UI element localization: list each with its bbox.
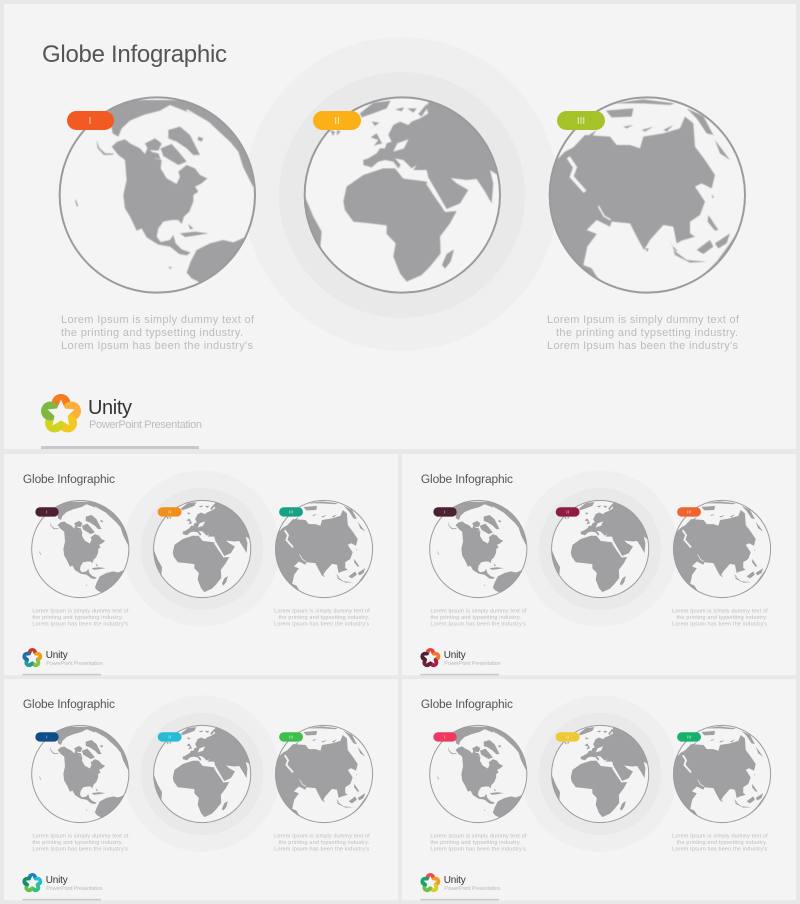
left text block: Lorem Ipsum has been the industry's xyxy=(61,340,254,352)
logo icon xyxy=(22,873,42,892)
left text: Lorem Ipsum has been the industry's xyxy=(430,847,526,853)
left text: the printing and typsetting industry. xyxy=(32,615,123,621)
rings xyxy=(521,695,678,852)
rings xyxy=(123,695,280,852)
globe: Americas xyxy=(32,725,133,823)
globe: Asia xyxy=(272,500,378,598)
panel: thumbnail variant D xyxy=(402,679,796,900)
logo wordmark xyxy=(46,650,102,667)
logo wordmark xyxy=(46,875,102,892)
logo icon xyxy=(41,394,81,432)
badge I: I xyxy=(444,735,445,741)
badge I: I xyxy=(444,510,445,516)
left text: the printing and typsetting industry. xyxy=(430,615,521,621)
left text: the printing and typsetting industry. xyxy=(430,840,521,846)
globe: Americas xyxy=(430,500,531,598)
left text: Lorem Ipsum is simply dummy text of xyxy=(32,609,129,615)
badge III xyxy=(557,111,605,130)
right text: Lorem Ipsum has been the industry's xyxy=(672,847,767,853)
left text xyxy=(32,834,129,853)
right text xyxy=(672,834,768,853)
right text: Lorem Ipsum has been the industry's xyxy=(274,847,369,853)
logo wordmark: Unity xyxy=(444,875,466,886)
left text block: the printing and typsetting industry. xyxy=(61,327,243,339)
badge III xyxy=(279,507,303,517)
right text: the printing and typsetting industry. xyxy=(677,615,768,621)
globe: Americas xyxy=(60,97,263,293)
title: Globe Infographic xyxy=(23,472,115,486)
badge III: III xyxy=(289,510,293,516)
badge II xyxy=(158,732,182,742)
logo icon xyxy=(420,873,440,892)
globe: Africa and Europe xyxy=(148,500,257,598)
logo wordmark: PowerPoint Presentation xyxy=(46,661,102,667)
right text: Lorem Ipsum has been the industry's xyxy=(274,622,369,628)
footer bar xyxy=(22,674,101,675)
logo wordmark xyxy=(444,875,500,892)
badge III: III xyxy=(687,735,691,741)
logo wordmark: PowerPoint Presentation xyxy=(46,886,102,892)
logo wordmark: Unity xyxy=(46,875,68,886)
logo wordmark: Unity xyxy=(88,397,132,419)
panel: thumbnail variant C xyxy=(4,679,398,900)
right text block xyxy=(547,314,740,352)
badge II: II xyxy=(566,510,569,516)
badge II: II xyxy=(168,735,171,741)
globe: Asia xyxy=(543,97,757,293)
badge I: I xyxy=(89,116,91,127)
badge II xyxy=(556,507,580,517)
left text block xyxy=(61,314,255,352)
right text: the printing and typsetting industry. xyxy=(677,840,768,846)
left text: Lorem Ipsum is simply dummy text of xyxy=(430,834,527,840)
footer bar xyxy=(22,899,101,900)
right text: Lorem Ipsum is simply dummy text of xyxy=(274,609,370,615)
logo wordmark xyxy=(88,397,202,431)
title: Globe Infographic xyxy=(23,697,115,711)
globe: Africa and Europe xyxy=(148,725,257,823)
logo wordmark: PowerPoint Presentation xyxy=(444,661,500,667)
right text: Lorem Ipsum is simply dummy text of xyxy=(672,609,768,615)
logo icon xyxy=(420,648,440,667)
badge I: I xyxy=(46,510,47,516)
left text xyxy=(430,609,527,628)
globe: Africa and Europe xyxy=(546,500,655,598)
globe: Africa and Europe xyxy=(546,725,655,823)
left text: Lorem Ipsum has been the industry's xyxy=(32,847,128,853)
title: Globe Infographic xyxy=(421,697,513,711)
right text xyxy=(274,609,370,628)
footer bar xyxy=(420,899,499,900)
globe: Asia xyxy=(272,725,378,823)
right text: Lorem Ipsum has been the industry's xyxy=(672,622,767,628)
left text xyxy=(430,834,527,853)
logo wordmark: PowerPoint Presentation xyxy=(444,886,500,892)
globe: Asia xyxy=(670,500,776,598)
logo wordmark: Unity xyxy=(444,650,466,661)
left text: Lorem Ipsum is simply dummy text of xyxy=(430,609,527,615)
globe: Africa and Europe xyxy=(293,97,513,293)
badge III xyxy=(677,732,701,742)
badge I xyxy=(433,732,457,742)
right text xyxy=(672,609,768,628)
panel: thumbnail variant A xyxy=(4,454,398,675)
right text: Lorem Ipsum is simply dummy text of xyxy=(274,834,370,840)
left text block: Lorem Ipsum is simply dummy text of xyxy=(61,314,255,326)
right text: Lorem Ipsum is simply dummy text of xyxy=(672,834,768,840)
title: Globe Infographic xyxy=(421,472,513,486)
logo wordmark: Unity xyxy=(46,650,68,661)
badge II: II xyxy=(566,735,569,741)
rings xyxy=(521,470,678,627)
badge II: II xyxy=(168,510,171,516)
badge III xyxy=(279,732,303,742)
left text: the printing and typsetting industry. xyxy=(32,840,123,846)
left text: Lorem Ipsum has been the industry's xyxy=(430,622,526,628)
badge III xyxy=(677,507,701,517)
panel: main slide xyxy=(4,4,796,449)
title: Globe Infographic xyxy=(42,41,227,68)
badge II xyxy=(556,732,580,742)
rings xyxy=(123,470,280,627)
right text block: Lorem Ipsum is simply dummy text of xyxy=(547,314,740,326)
concentric ring backdrop xyxy=(244,37,558,351)
left text: Lorem Ipsum is simply dummy text of xyxy=(32,834,129,840)
badge II xyxy=(313,111,361,130)
globe: Americas xyxy=(32,500,133,598)
badge I xyxy=(433,507,457,517)
footer bar xyxy=(420,674,499,675)
left text: Lorem Ipsum has been the industry's xyxy=(32,622,128,628)
badge I: I xyxy=(46,735,47,741)
badge I xyxy=(35,732,59,742)
right text xyxy=(274,834,370,853)
badge III: III xyxy=(289,735,293,741)
footer bar xyxy=(41,446,199,449)
badge I xyxy=(67,111,114,130)
logo icon xyxy=(22,648,42,667)
right text block: Lorem Ipsum has been the industry's xyxy=(547,340,738,352)
badge II: II xyxy=(334,116,340,127)
right text: the printing and typsetting industry. xyxy=(279,840,370,846)
globe: Americas xyxy=(430,725,531,823)
left text xyxy=(32,609,129,628)
badge III: III xyxy=(687,510,691,516)
right text: the printing and typsetting industry. xyxy=(279,615,370,621)
globe: Asia xyxy=(670,725,776,823)
logo wordmark xyxy=(444,650,500,667)
badge I xyxy=(35,507,59,517)
badge II xyxy=(158,507,182,517)
logo wordmark: PowerPoint Presentation xyxy=(89,419,202,431)
right text block: the printing and typsetting industry. xyxy=(556,327,738,339)
badge III: III xyxy=(577,116,585,127)
panel: thumbnail variant B xyxy=(402,454,796,675)
